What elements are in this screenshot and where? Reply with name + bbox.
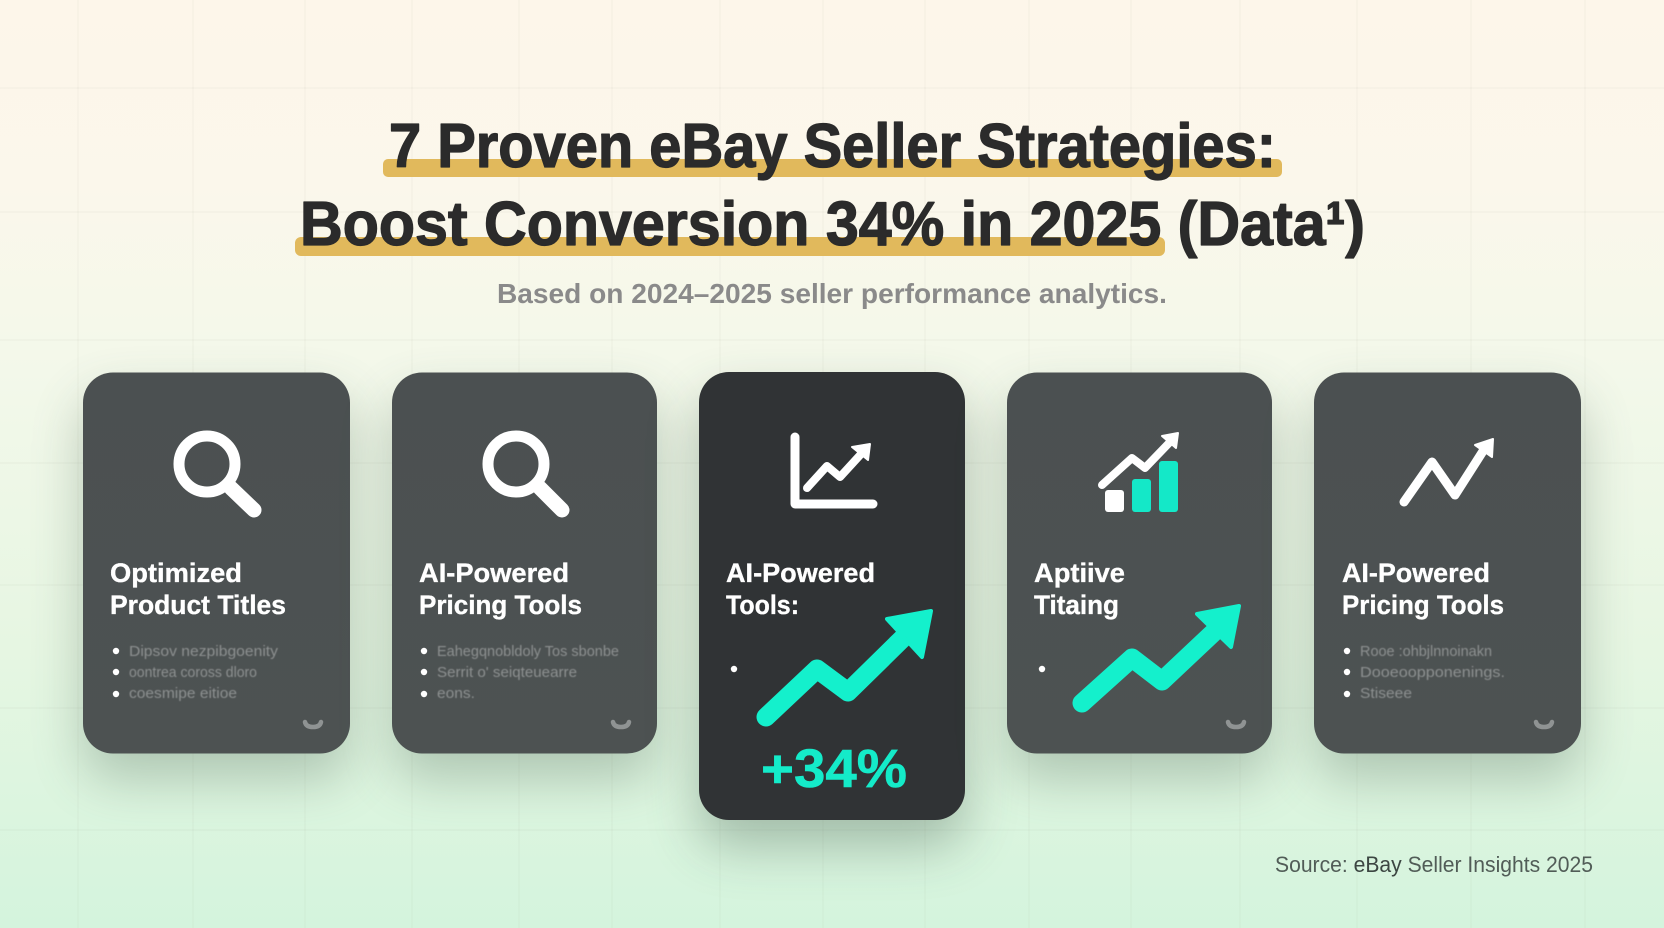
card 2 heading: Pricing Tools	[419, 590, 582, 620]
title line 1: 7 Proven eBay Seller Strategies:	[389, 112, 1276, 181]
card 2 bullets	[421, 643, 619, 702]
card 5 heading	[1342, 558, 1504, 620]
card 5 bullets: Rooe :ohbjlnnoinakn	[1360, 643, 1492, 660]
card 2 bullets: Serrit o' seiqteuearre	[437, 664, 577, 681]
icon: smile mark	[1228, 722, 1244, 727]
card 4 bullet	[1039, 666, 1045, 672]
icon: trend arrow	[1404, 439, 1493, 502]
title highlight line 1	[383, 159, 1282, 177]
card 3 heading	[726, 558, 875, 620]
icon: smile mark	[1536, 722, 1552, 727]
card 1 bullets: oontrea coross dloro	[129, 664, 257, 681]
card 2 heading: AI-Powered	[419, 558, 569, 588]
icon: magnifier	[179, 436, 254, 510]
card 3 heading: AI-Powered	[726, 558, 875, 588]
card 2 heading	[419, 558, 582, 620]
title line 2: Boost Conversion 34% in 2025 (Data¹)	[300, 190, 1365, 259]
card 1 bullets: Dipsov nezpibgoenity	[129, 643, 279, 660]
card 5 heading: AI-Powered	[1342, 558, 1490, 588]
card 4 heading	[1034, 558, 1125, 620]
title	[295, 112, 1365, 259]
panel: card 1 optimized product titles	[83, 372, 350, 779]
card 4 heading: Aptiive	[1034, 558, 1125, 588]
panel: card 2 AI-powered pricing tools	[392, 372, 657, 779]
subtitle: Based on 2024–2025 seller performance analytics.	[497, 278, 1167, 309]
icon: green growth arrow	[766, 611, 931, 717]
card 5 bullets: Stiseee	[1360, 685, 1412, 702]
card 4 heading: Titaing	[1034, 590, 1119, 620]
icon: magnifier	[488, 436, 562, 510]
panel: card 3 highlighted AI-powered tools	[699, 372, 965, 846]
card 1 heading	[110, 558, 286, 620]
card 5 bullets: Dooeoopponenings.	[1360, 664, 1505, 681]
card 1 bullets	[113, 643, 279, 702]
icon: smile mark	[305, 722, 321, 727]
icon: green growth arrow	[1082, 606, 1239, 703]
icon: bars and trend	[1102, 433, 1178, 512]
card 1 heading: Product Titles	[110, 590, 286, 620]
card 5 heading: Pricing Tools	[1342, 590, 1504, 620]
card 2 bullets: eons.	[437, 685, 475, 702]
panel: card 4 adaptive pricing	[1007, 372, 1272, 779]
panel: card 5 AI-powered pricing tools	[1314, 372, 1581, 779]
card 1 bullets: coesmipe eitioe	[129, 685, 237, 702]
card 3 heading: Tools:	[726, 590, 799, 620]
icon: smile mark	[613, 722, 629, 727]
stat: +34%: +34%	[761, 739, 907, 799]
card 2 bullets: Eahegqnobldoly Tos sbonbe	[437, 643, 619, 660]
title highlight line 2	[295, 237, 1165, 256]
source note: Source: eBay Seller Insights 2025	[1275, 852, 1593, 877]
icon: line chart	[795, 437, 873, 504]
card 5 bullets	[1344, 643, 1505, 702]
card 3 bullet	[731, 666, 737, 672]
card 1 heading: Optimized	[110, 558, 242, 588]
